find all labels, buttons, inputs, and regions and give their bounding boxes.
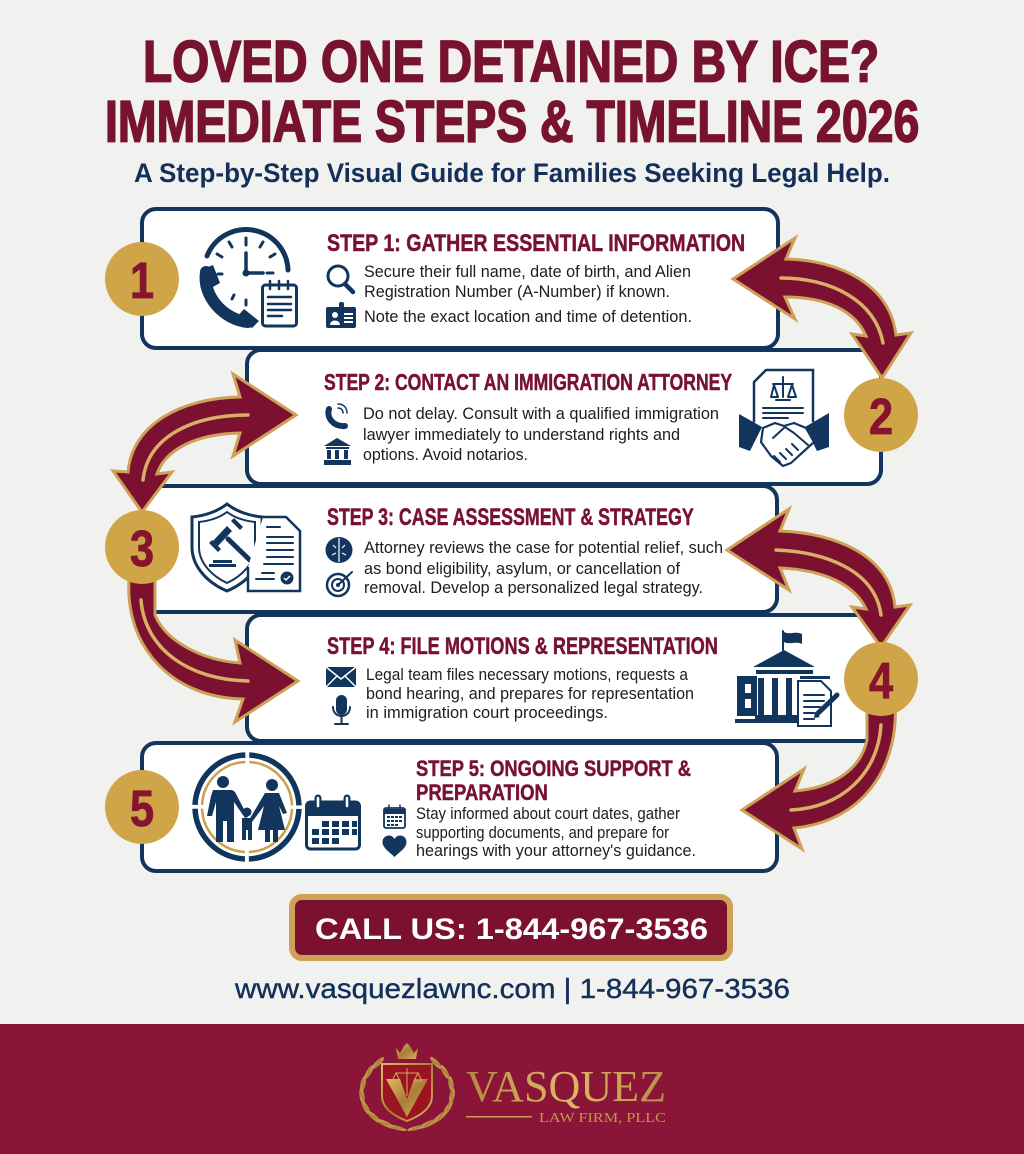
subtitle: A Step-by-Step Visual Guide for Families Seeking Legal Help.	[134, 158, 890, 188]
step number 1	[105, 242, 179, 316]
logo	[358, 1043, 666, 1132]
icon: courthouse, document and pen	[735, 631, 837, 726]
icon: laurel wreath	[358, 1056, 456, 1132]
text block: hearings with your attorney's guidance.	[416, 842, 696, 860]
text block	[363, 405, 719, 464]
firm subtitle: LAW FIRM, PLLC	[539, 1111, 666, 1126]
arrow: step 2 to step 3	[113, 374, 296, 512]
text block	[366, 666, 694, 722]
panel: step 4	[247, 615, 881, 741]
text block: Legal team files necessary motions, requests a	[366, 666, 689, 684]
call button: CALL US: 1-844-967-3536	[315, 913, 708, 946]
step number 2	[844, 378, 918, 452]
icon: microphone	[333, 695, 350, 724]
text block: Secure their full name, date of birth, and Alien	[364, 263, 691, 281]
step number 3	[105, 510, 179, 584]
step number 4: 4	[869, 653, 894, 710]
text block: Registration Number (A-Number) if known.	[364, 283, 670, 301]
title	[105, 30, 919, 155]
text block: supporting documents, and prepare for	[416, 824, 669, 842]
text block: Do not delay. Consult with a qualified immigration	[363, 405, 719, 423]
arrow: step 3 to step 4	[129, 580, 298, 722]
panel: step 5	[142, 743, 777, 871]
heading	[416, 756, 691, 805]
icon: envelope	[326, 667, 356, 687]
text block: removal. Develop a personalized legal strategy.	[364, 579, 703, 597]
icon: target	[327, 572, 352, 596]
icon: clock, phone and notepad	[203, 230, 296, 328]
heading: STEP 4: FILE MOTIONS & REPRESENTATION	[327, 633, 718, 660]
icon: small calendar	[384, 805, 405, 828]
text block: bond hearing, and prepares for representation	[366, 685, 694, 703]
icon: shield with V	[382, 1064, 432, 1121]
text block: lawyer immediately to understand rights and	[363, 426, 680, 444]
text block: in immigration court proceedings.	[366, 704, 608, 722]
icon: brain	[326, 537, 352, 563]
step number 5	[105, 770, 179, 844]
icon: crown	[396, 1043, 418, 1059]
heading: STEP 1: GATHER ESSENTIAL INFORMATION	[327, 229, 745, 256]
text block: Stay informed about court dates, gather	[416, 805, 680, 823]
icon: legal document and handshake	[739, 370, 829, 466]
arrow: step 4 to step 5	[742, 700, 895, 849]
title: LOVED ONE DETAINED BY ICE?	[143, 30, 879, 95]
text block: as bond eligibility, asylum, or cancellation of	[364, 560, 680, 578]
heading: STEP 5: ONGOING SUPPORT &	[416, 756, 691, 781]
icon: courthouse	[324, 438, 351, 465]
text block	[364, 263, 692, 326]
icon: phone	[328, 404, 347, 426]
icon: id card	[326, 302, 356, 328]
heading: PREPARATION	[416, 780, 548, 805]
step number 4	[844, 642, 918, 716]
icon: shield, gavel and document	[192, 504, 300, 591]
icon: calendar	[306, 798, 360, 849]
heading: STEP 2: CONTACT AN IMMIGRATION ATTORNEY	[324, 371, 732, 396]
text block	[416, 805, 696, 860]
text block: options. Avoid notarios.	[363, 446, 528, 464]
panel: step 3	[142, 486, 777, 612]
panel: step 1	[142, 209, 778, 348]
step number 5: 5	[130, 781, 154, 838]
arrow: step 1 to step 2	[733, 238, 911, 378]
website and phone: www.vasquezlawnc.com | 1-844-967-3536	[234, 973, 790, 1004]
rule	[466, 1116, 532, 1118]
icon: family in circle	[195, 755, 299, 859]
call button	[292, 897, 730, 958]
step number 3: 3	[130, 521, 154, 578]
text block: Note the exact location and time of detention.	[364, 308, 692, 326]
title: IMMEDIATE STEPS & TIMELINE 2026	[105, 91, 919, 155]
text block	[364, 539, 723, 597]
firm name: VASQUEZ	[466, 1062, 666, 1111]
text block: Attorney reviews the case for potential relief, such	[364, 539, 723, 557]
arrow: step 3 to step 4 right side	[727, 509, 910, 647]
step number 2: 2	[869, 389, 893, 446]
footer band	[0, 1024, 1024, 1154]
heading: STEP 3: CASE ASSESSMENT & STRATEGY	[327, 504, 694, 531]
icon: heart	[382, 835, 406, 857]
icon: magnifier	[328, 266, 353, 292]
panel: step 2	[247, 350, 881, 484]
step number 1: 1	[130, 253, 154, 310]
